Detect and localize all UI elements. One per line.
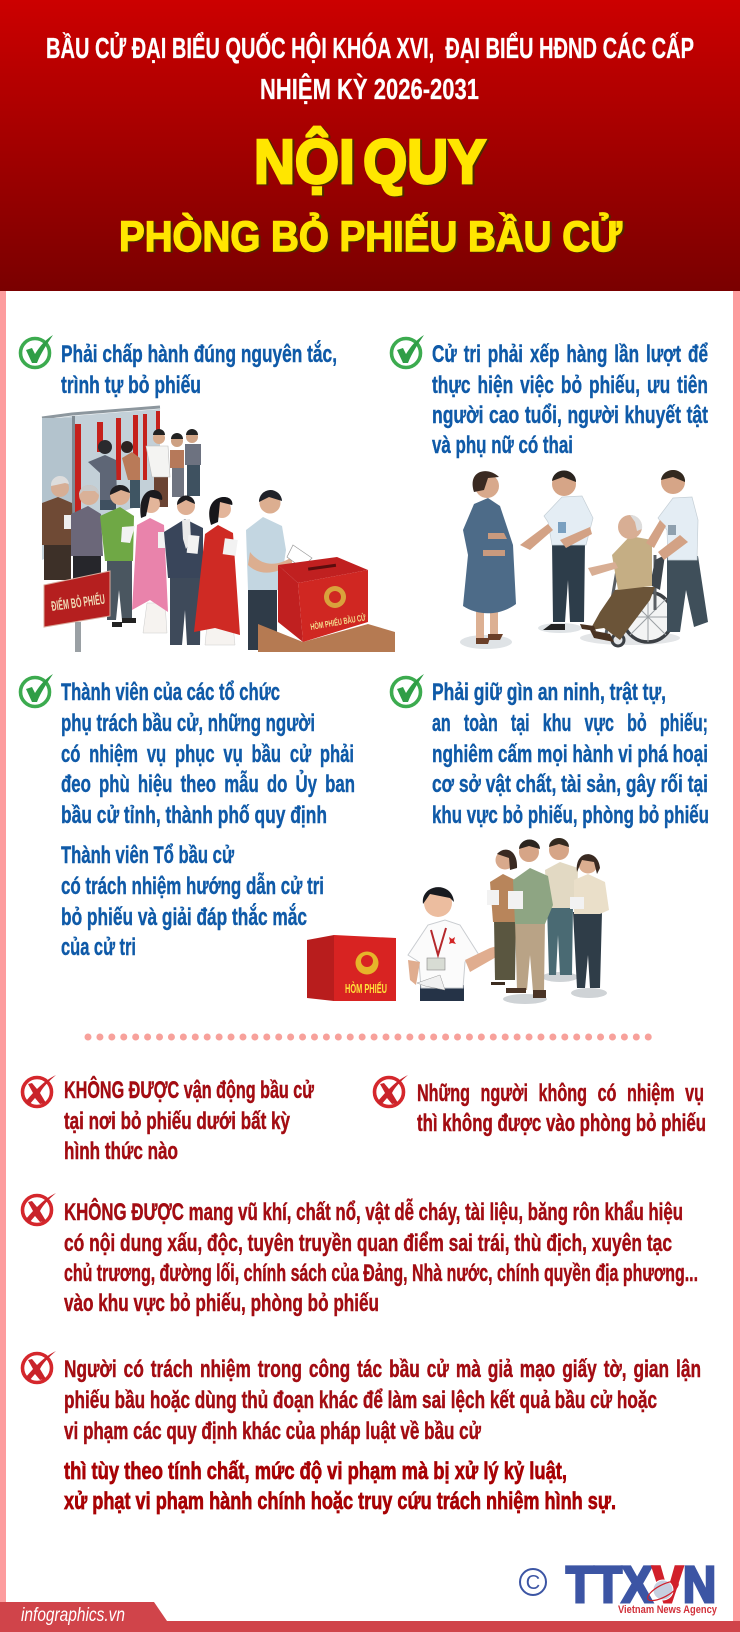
illustration: officials helping pregnant woman and elderly man [460, 470, 708, 649]
footer source text: infographics.vn [21, 1605, 125, 1626]
text: ban on weapons and materials: vào khu vực bỏ phiếu, phòng bỏ phiếu [64, 1290, 379, 1317]
text: election team duty [61, 842, 324, 961]
text: rule 1: Phải chấp hành đúng nguyên tắc, [61, 340, 337, 368]
man 4 far [547, 906, 573, 975]
panel: header [0, 0, 740, 291]
text: rule 3: Thành viên của các tổ chức [61, 679, 280, 706]
text: rule 4 [432, 679, 709, 829]
text: rule 1 [61, 340, 337, 399]
text: ban on campaigning [64, 1076, 314, 1165]
icon: check 4 [392, 674, 424, 706]
sign: điểm bỏ phiếu [44, 571, 110, 652]
text: ban on campaigning: hình thức nào [64, 1138, 178, 1165]
front voters [42, 476, 292, 650]
left pink border [0, 291, 6, 1606]
woman 1 [494, 920, 516, 980]
voters group [487, 838, 609, 1004]
sign: điểm bỏ phiếu: ĐIỂM BỎ PHIẾU [50, 590, 106, 614]
icon: check 3 [20, 674, 53, 706]
text: ban on weapons and materials [64, 1198, 698, 1317]
heading: election title: NHIỆM KỲ 2026-2031 [260, 72, 479, 106]
illustration: voters queue at polling station [42, 407, 395, 652]
logo: TTXVN: TTXVN [566, 1556, 716, 1613]
text: rule 2: và phụ nữ có thai [432, 432, 573, 459]
text: rule 3 [61, 679, 355, 829]
ballot box: HÒM PHIẾU BẦU CỬ [309, 611, 367, 632]
text: ban on campaigning: tại nơi bỏ phiếu dưới bất kỳ [64, 1108, 290, 1135]
pregnant woman [460, 471, 516, 649]
icon: cross 1 [22, 1075, 56, 1106]
official [408, 887, 508, 1001]
table [258, 624, 395, 652]
ballot paper [287, 545, 312, 568]
text: rule 3: bầu cử tỉnh, thành phố quy định [61, 802, 327, 829]
icon: cross 2 [374, 1075, 408, 1106]
back voters [88, 429, 201, 510]
official 2 [646, 470, 708, 632]
ballot box [278, 557, 368, 642]
text: election team duty: bỏ phiếu và giải đáp thắc mắc [61, 903, 307, 931]
text: penalties [64, 1458, 616, 1515]
text: rule 1: trình tự bỏ phiếu [61, 372, 201, 399]
subtitle: Phòng bỏ phiếu bầu cử: PHÒNG BỎ PHIẾU BẦU CỬ [119, 212, 622, 261]
official 1 [520, 470, 593, 633]
illustration: official guiding voters beside ballot box [307, 838, 609, 1004]
logo: TTXVN: Vietnam News Agency [618, 1604, 718, 1616]
man 2 green [515, 920, 545, 992]
title: Nội quy: NỘI QUY [254, 128, 486, 197]
text: officials' violations [64, 1356, 701, 1445]
divider: dotted line [88, 1034, 651, 1040]
text: ban on unauthorised entry [417, 1080, 706, 1137]
icon: check 2 [392, 335, 424, 368]
text: officials' violations: vi phạm các quy định khác của pháp luật về bầu cử [64, 1418, 481, 1445]
text: election team duty: có trách nhiệm hướng dẫn cử tri [61, 872, 324, 900]
ballot box: HÒM PHIẾU [345, 981, 387, 996]
text: election team duty: của cử tri [61, 934, 136, 961]
right pink border [733, 291, 740, 1626]
text: rule 3: phụ trách bầu cử, những người [61, 710, 315, 737]
text: ban on campaigning: KHÔNG ĐƯỢC vận động bầu cử [64, 1076, 314, 1104]
footer band [0, 1602, 740, 1632]
icon: cross 4 [22, 1351, 56, 1382]
ballot box [307, 935, 396, 1001]
text: rule 2 [432, 341, 708, 459]
text: election team duty: Thành viên Tổ bầu cử [61, 842, 234, 869]
text: rule 3: đeo phù hiệu theo mẫu do Ủy ban [61, 769, 355, 798]
wheelchair and elderly man [580, 515, 680, 646]
icon: cross 3 [22, 1193, 56, 1224]
woman 5 [573, 912, 602, 988]
text: rule 3: có nhiệm vụ phục vụ bầu cử phải [61, 741, 354, 768]
text: penalties: thì tùy theo tính chất, mức độ vi phạm mà bị xử lý kỷ luật, [64, 1458, 567, 1485]
heading: election title [46, 31, 694, 106]
icon: copyright [520, 1569, 546, 1595]
icon: copyright: C [526, 1572, 540, 1594]
icon: check 1 [20, 335, 53, 368]
